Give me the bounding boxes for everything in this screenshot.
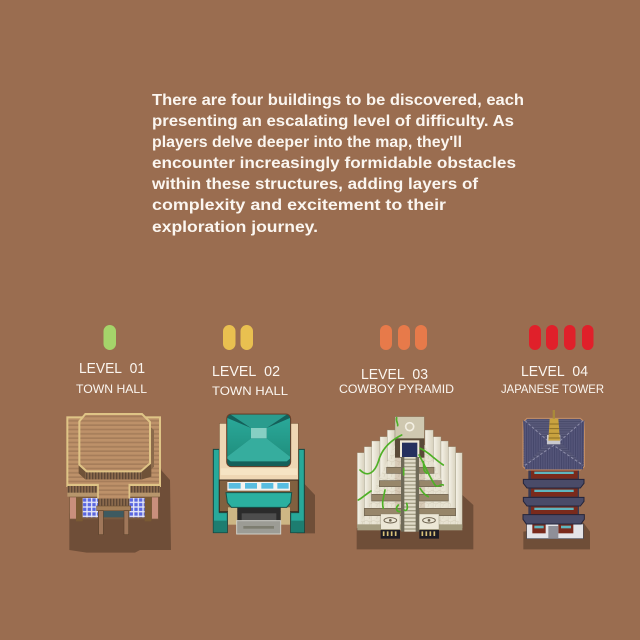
ground floor: [527, 524, 583, 539]
eye tablets: [381, 514, 439, 529]
intro paragraph: exploration journey.: [152, 219, 318, 236]
building: town hall, teal roof: [213, 414, 315, 534]
top slate roof: [523, 418, 584, 470]
level 03 column: cowboy pyramid: [339, 325, 473, 549]
stepped stone columns: [357, 430, 462, 528]
level 02 building name: TOWN HALL: [212, 384, 288, 398]
level 02 column: town hall: [212, 325, 315, 534]
slate eaves: [523, 479, 584, 524]
main wall: [219, 423, 298, 512]
intro paragraph: complexity and excitement to their: [152, 197, 446, 214]
upper roof: [79, 414, 154, 479]
building: town hall, wooden roof: [67, 414, 171, 553]
body behind floors: [528, 467, 579, 524]
intro paragraph: encounter increasingly formidable obstacles: [152, 155, 516, 172]
cast shadow: [69, 427, 171, 553]
cast shadow: [297, 483, 315, 533]
level 01 label: LEVEL 01: [79, 360, 145, 377]
level 04 building name: JAPANESE TOWER: [501, 382, 604, 396]
teal pyramid roof: [227, 414, 291, 467]
lower roof: [67, 417, 160, 497]
level 04 column: japanese tower: [501, 325, 604, 549]
ledges: [364, 467, 456, 516]
walls and windows: [69, 495, 159, 521]
building: japanese tower: [523, 410, 590, 549]
intro paragraph: players delve deeper into the map, they'll: [152, 134, 462, 151]
level 03 building name: COWBOY PYRAMID: [339, 382, 454, 396]
side wings: [213, 449, 304, 533]
building: cowboy pyramid: [357, 417, 473, 549]
level 01 column: town hall: [67, 325, 171, 553]
intro paragraph: [151, 92, 524, 236]
difficulty pills: level 01: [104, 325, 116, 350]
base: [357, 524, 462, 530]
red balcony floors: [531, 470, 578, 515]
level 03 label: LEVEL 03: [361, 366, 428, 383]
cast shadow: [523, 523, 590, 549]
difficulty pills: level 03: [380, 325, 427, 350]
level 04 label: LEVEL 04: [521, 363, 588, 380]
difficulty pills: level 04: [529, 325, 594, 350]
feet decorations: [381, 530, 439, 539]
entrance roof: [67, 483, 161, 535]
level 02 label: LEVEL 02: [212, 363, 280, 380]
central stone face: [357, 445, 462, 528]
gold spire: [548, 410, 560, 441]
central stairs: [401, 457, 419, 532]
intro paragraph: within these structures, adding layers of: [151, 176, 479, 193]
intro paragraph: presenting an escalating level of difficulty. As: [152, 113, 514, 130]
intro paragraph: There are four buildings to be discovered, each: [152, 92, 524, 109]
top block and doorway: [395, 417, 424, 458]
cast shadow: [357, 494, 473, 549]
awning: [226, 493, 292, 507]
green vines: [358, 418, 443, 512]
level 01 building name: TOWN HALL: [76, 382, 147, 396]
difficulty pills: level 02: [223, 325, 253, 350]
entrance and stairs: [228, 507, 290, 534]
